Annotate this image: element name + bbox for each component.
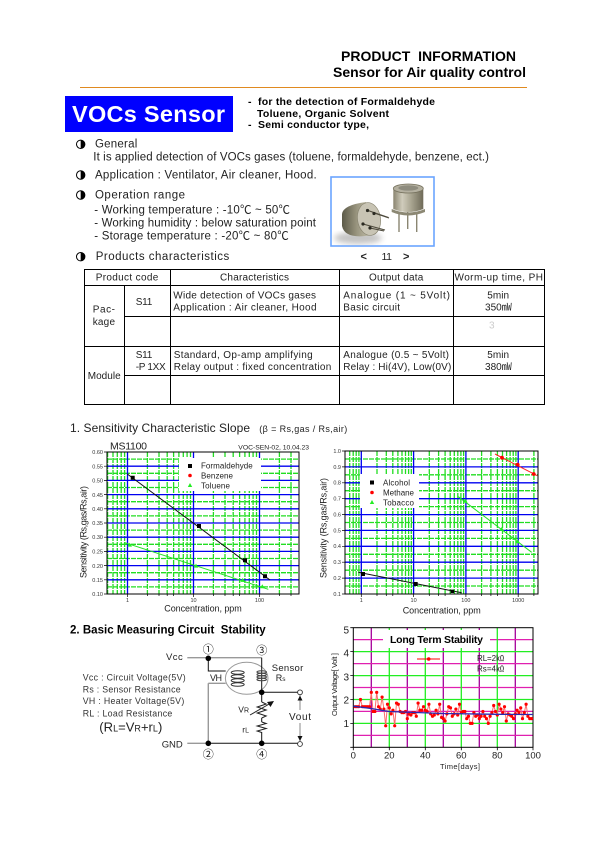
circuit labels: Sensor — [272, 663, 303, 674]
legend: Alcohol — [383, 478, 410, 488]
products table: Analogue (0.5 ~ 5Volt) — [343, 350, 449, 361]
y-axis tick labels: 0.35 — [92, 521, 103, 527]
chart: sensitivity alcohol methane tobacco — [319, 449, 538, 615]
products table: Basic circuit — [343, 303, 400, 314]
feature list — [248, 96, 435, 131]
chart: sensitivity formaldehyde benzene toluene: MS1100 — [110, 441, 147, 453]
y-axis tick labels: 1 — [343, 719, 349, 730]
y-axis tick labels: 0.7 — [333, 496, 341, 502]
section: operation range: Operation range — [95, 190, 185, 202]
VOCs Sensor title badge: VOCs Sensor — [72, 101, 225, 127]
section: products characteristics heading: Products characteristics — [96, 251, 230, 263]
products table: Application : Air cleaner, Hood — [173, 303, 316, 314]
series legend — [417, 654, 504, 674]
legend: Toluene — [201, 482, 231, 490]
measured series — [355, 692, 532, 726]
products table: Worm-up time, PH — [454, 273, 543, 284]
section 1 heading: 1. Sensitivity Characteristic Slope — [70, 421, 250, 435]
y-axis tick labels — [92, 450, 103, 598]
page selector: < — [360, 251, 367, 263]
x-axis tick labels: 60 — [456, 750, 467, 762]
axis titles: Time[days] — [440, 762, 480, 771]
y-axis tick labels: 0.50 — [92, 478, 103, 484]
products table: 5min — [487, 350, 509, 361]
y-axis tick labels — [343, 626, 349, 730]
y-axis tick labels: 1.0 — [333, 449, 341, 455]
products table: Output data — [369, 273, 424, 284]
section 2 heading: 2. Basic Measuring Circuit Stability — [70, 624, 266, 636]
products table: S11 — [136, 297, 153, 308]
circuit labels: ④ — [256, 748, 267, 761]
legend — [179, 458, 261, 491]
products table: Module — [88, 371, 121, 382]
series: methane — [495, 454, 537, 476]
axis titles: Concentration, ppm — [403, 605, 481, 615]
x-axis tick labels: 0 — [351, 750, 356, 762]
series: alcohol — [358, 572, 462, 593]
axis titles: Output Voltage[ Volt ] — [330, 653, 339, 716]
products table: Wide detection of VOCs gases — [173, 291, 316, 302]
circuit legend: (RL=VR+rL) — [99, 720, 162, 735]
axis titles — [78, 486, 242, 614]
header title — [333, 48, 526, 80]
circuit legend: Vcc : Circuit Voltage(5V) — [83, 673, 186, 683]
circuit legend: RL : Load Resistance — [83, 709, 172, 719]
products table: -P 1XX — [136, 362, 166, 373]
legend: Tobacco — [383, 498, 415, 508]
header title: PRODUCT INFORMATION — [341, 48, 516, 64]
circuit diagram — [162, 643, 312, 761]
legend — [360, 474, 419, 508]
product photo — [331, 177, 434, 246]
output terminals and arrow: Vout — [289, 712, 311, 723]
section: operation range: - Working temperature : -10℃ ~ 50℃ — [94, 205, 290, 217]
circuit labels: GND — [162, 740, 183, 751]
x-axis tick labels: 1 — [126, 598, 129, 604]
feature list: - for the detection of Formaldehyde — [248, 96, 435, 108]
section: application: Application : Ventilator, Air cleaner, Hood. — [95, 170, 317, 182]
x-axis tick labels — [360, 598, 524, 604]
y-axis tick labels: 0.9 — [333, 465, 341, 471]
y-axis tick labels: 0.15 — [92, 578, 103, 584]
section: general: General — [95, 139, 137, 151]
circuit legend: VH : Heater Voltage(5V) — [83, 696, 184, 706]
circuit labels: rL — [242, 725, 249, 735]
x-axis tick labels: 40 — [420, 750, 431, 762]
section: operation range: - Working humidity : below saturation point — [94, 218, 317, 230]
section 1 heading — [70, 421, 347, 435]
y-axis tick labels: 0.20 — [92, 564, 103, 570]
products table: Relay output : fixed concentration — [174, 362, 331, 373]
y-axis tick labels: 0.5 — [333, 528, 341, 534]
circuit labels: ② — [203, 748, 214, 761]
axis titles: Sensitivity (Rs,gas/Rs,air) — [319, 478, 329, 578]
section: operation range — [76, 190, 317, 243]
legend: Formaldehyde — [201, 462, 253, 470]
axis titles — [319, 478, 481, 615]
resistor VR — [250, 701, 274, 718]
chart: long term stability — [330, 626, 541, 771]
circuit labels: ③ — [256, 644, 267, 657]
products table: Pac- — [93, 305, 115, 316]
axis titles — [330, 653, 480, 771]
axis titles: Sensitivity (Rs,gas/Rs,air) — [78, 486, 88, 578]
y-axis tick labels: 0.6 — [333, 512, 341, 518]
y-axis tick labels: 3 — [343, 672, 349, 684]
products table — [84, 270, 544, 404]
header title: Sensor for Air quality control — [333, 64, 526, 80]
circuit legend: Rs : Sensor Resistance — [83, 684, 181, 694]
VOCs Sensor title badge — [65, 96, 233, 132]
legend: Benzene — [201, 472, 234, 480]
series legend: RL=2㏀ — [477, 654, 504, 663]
circuit labels — [162, 643, 303, 761]
feature list: - Semi conductor type, — [248, 119, 369, 131]
products table: 380㎽ — [485, 362, 512, 373]
section: operation range: - Storage temperature : -20℃ ~ 80℃ — [94, 231, 289, 243]
x-axis tick labels — [126, 598, 264, 604]
products table: 3 — [489, 321, 495, 332]
page selector: 11 — [382, 251, 392, 263]
x-axis tick labels: 10 — [190, 598, 197, 604]
y-axis tick labels: 0.55 — [92, 464, 103, 470]
products table: Product code — [96, 273, 159, 284]
circuit labels: VR — [238, 704, 249, 714]
circuit labels: Vcc — [166, 652, 183, 663]
products table: Analogue (1 ~ 5Volt) — [343, 291, 450, 302]
products table: kage — [93, 317, 115, 328]
y-axis tick labels: 2 — [343, 696, 349, 706]
circuit labels: ① — [203, 643, 214, 656]
products table: 5min — [487, 291, 509, 302]
y-axis tick labels: 0.25 — [92, 550, 103, 556]
feature list: Toluene, Organic Solvent — [257, 108, 390, 120]
chart title — [383, 630, 490, 648]
chart: sensitivity formaldehyde benzene toluene — [78, 441, 309, 614]
x-axis tick labels: 10 — [411, 598, 417, 604]
circuit labels: Rs — [276, 673, 286, 683]
chart title: Long Term Stability — [390, 634, 483, 646]
x-axis tick labels: 20 — [384, 750, 395, 762]
y-axis tick labels: 0.30 — [92, 535, 103, 541]
y-axis tick labels: 0.4 — [333, 544, 341, 550]
circuit labels: VH — [210, 673, 222, 683]
series legend: Rs=4㏀ — [477, 665, 504, 674]
y-axis tick labels: 0.3 — [333, 560, 341, 566]
page selector: > — [403, 251, 409, 263]
x-axis tick labels: 1000 — [512, 598, 524, 604]
y-axis tick labels: 0.1 — [333, 592, 341, 598]
products table: Standard, Op-amp amplifying — [174, 350, 313, 361]
resistor rL — [257, 722, 266, 732]
y-axis tick labels: 0.2 — [333, 576, 341, 582]
section 1 heading: (β = Rs,gas / Rs,air) — [259, 424, 347, 434]
x-axis tick labels: 80 — [492, 750, 503, 762]
y-axis tick labels: 4 — [343, 648, 349, 660]
y-axis tick labels: 0.45 — [92, 493, 103, 499]
x-axis tick labels: 100 — [525, 750, 541, 762]
y-axis tick labels: 0.40 — [92, 507, 103, 513]
products table: Relay : Hi(4V), Low(0V) — [343, 362, 451, 373]
products table: Characteristics — [220, 273, 289, 284]
series: tobacco — [458, 497, 532, 552]
x-axis tick labels: 100 — [461, 598, 470, 604]
y-axis tick labels — [333, 449, 341, 598]
section: general: It is applied detection of VOCs gases (toluene, formaldehyde, benzene, ect.) — [93, 152, 489, 164]
trend line — [353, 706, 533, 714]
x-axis tick labels: 1 — [360, 598, 363, 604]
x-axis tick labels — [351, 750, 541, 762]
legend: Methane — [383, 488, 415, 498]
section: general — [76, 139, 489, 164]
series: formaldehyde — [127, 474, 270, 580]
junction dots — [206, 656, 265, 746]
y-axis tick labels: 0.10 — [92, 592, 103, 598]
products table: S11 — [136, 350, 153, 361]
x-axis tick labels: 100 — [255, 598, 264, 604]
series: toluene — [125, 543, 268, 589]
output terminals and arrow — [288, 690, 312, 746]
y-axis tick labels: 5 — [343, 626, 349, 636]
chart: sensitivity formaldehyde benzene toluene: VOC-SEN-02, 10.04.23 — [238, 445, 309, 452]
axis titles: Concentration, ppm — [164, 604, 242, 614]
icon: sensor coil — [257, 671, 267, 681]
y-axis tick labels: 0.8 — [333, 480, 341, 486]
page selector — [360, 251, 409, 263]
y-axis tick labels: 0.60 — [92, 450, 103, 456]
circuit legend — [83, 673, 186, 735]
products table: 350㎽ — [485, 303, 512, 314]
icon: heater coil — [231, 671, 244, 686]
